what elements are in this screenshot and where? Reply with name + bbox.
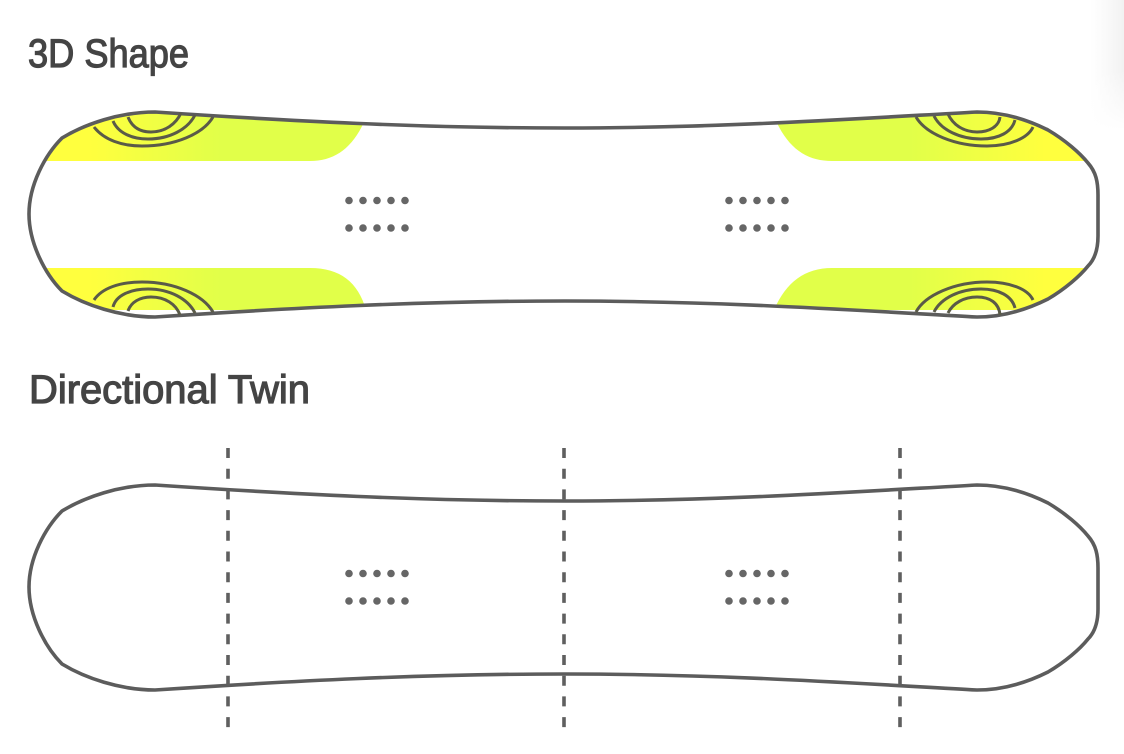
board outline bbox=[29, 112, 1098, 317]
contour rings bbox=[94, 113, 1033, 315]
right edge shading bbox=[1090, 0, 1124, 130]
heading: Directional Twin: Directional Twin bbox=[29, 368, 310, 412]
dashed section lines bbox=[228, 448, 900, 728]
binding inserts bbox=[345, 197, 789, 232]
heading: 3D Shape: 3D Shape bbox=[28, 32, 189, 76]
board outline bbox=[29, 485, 1098, 690]
binding inserts bbox=[345, 570, 789, 605]
yellow 3D zones bbox=[46, 114, 1084, 310]
snowboard: Directional Twin bbox=[29, 448, 1098, 728]
snowboard: 3D Shape bbox=[20, 100, 1110, 317]
